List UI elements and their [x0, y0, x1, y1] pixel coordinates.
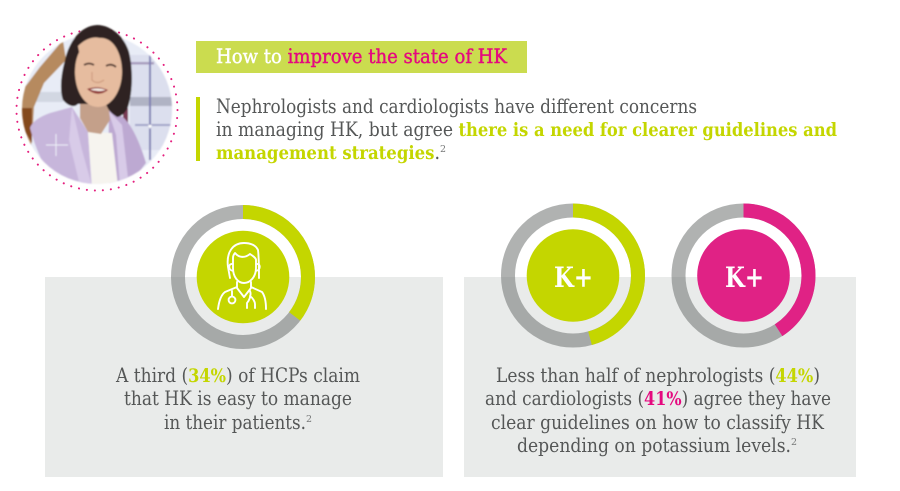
donut chart: 41% cardiologists: [678, 210, 808, 340]
right card text: depending on potassium levels.: [517, 434, 791, 457]
title banner: [196, 41, 527, 73]
left card text: [115, 364, 360, 434]
intro text block with side bar: in managing HK, but agree there is a need for clearer guidelines and: [216, 118, 837, 141]
intro text block with side bar: Nephrologists and cardiologists have different concerns: [216, 95, 697, 118]
panel: right grey card: [464, 277, 856, 477]
left card text: A third (34%) of HCPs claim: [115, 364, 360, 387]
right card text: 2: [791, 437, 797, 448]
right card text: Less than half of nephrologists (44%): [496, 364, 820, 387]
donut chart: 34% easy to manage: [178, 212, 308, 342]
right card text: and cardiologists (41%) agree they have: [485, 387, 831, 410]
dotted pink ring: [16, 30, 178, 190]
left card text: 2: [306, 414, 312, 425]
K+ label: K+: [725, 261, 764, 294]
left card text: that HK is easy to manage: [124, 387, 352, 410]
right card text: [485, 364, 831, 457]
K+ label: K+: [554, 261, 593, 294]
intro text block with side bar: [196, 95, 837, 164]
title text: How to improve the state of HK: [216, 45, 507, 68]
photo: smiling woman doctor with dotted ring: [16, 25, 178, 190]
intro text block with side bar: management strategies.: [216, 141, 440, 164]
donut chart: 44% nephrologists: [508, 210, 638, 340]
panel: left grey card: [45, 277, 443, 477]
intro text block with side bar: 2: [440, 144, 446, 155]
icon: female doctor with stethoscope: [218, 243, 266, 309]
right card text: clear guidelines on how to classify HK: [491, 411, 824, 434]
left card text: in their patients.: [164, 411, 306, 434]
